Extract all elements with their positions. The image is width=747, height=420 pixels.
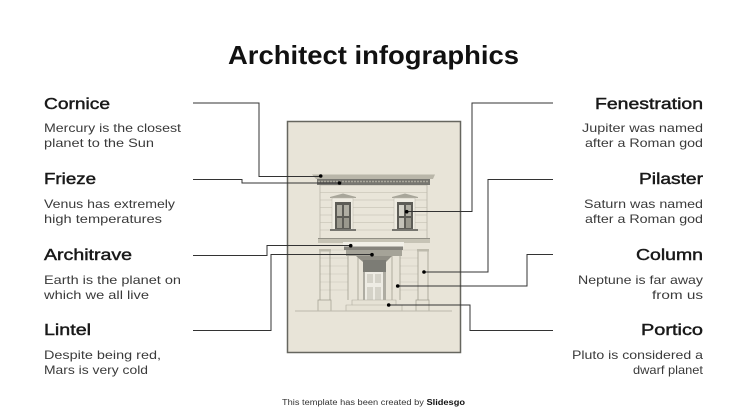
block: Fenestration: Fenestration — [595, 96, 703, 113]
block: Portico: dwarf planet — [633, 363, 704, 377]
panel background — [288, 122, 460, 352]
block: Architrave: Architrave — [44, 247, 132, 264]
lower cornice — [318, 238, 430, 243]
right window — [392, 194, 418, 231]
block: Frieze: Frieze — [44, 171, 96, 188]
block: Cornice: Mercury is the closest — [44, 121, 182, 135]
connector: Fenestration — [405, 103, 553, 214]
connector: Cornice — [193, 103, 323, 178]
block: Column: Column — [636, 247, 703, 264]
ground line — [295, 310, 452, 312]
block: Fenestration: Jupiter was named — [582, 121, 703, 135]
connector: Pilaster — [422, 180, 553, 274]
connector: Lintel — [193, 253, 374, 330]
connector: Architrave — [193, 244, 353, 256]
block: Pilaster: Pilaster — [639, 171, 704, 188]
title: Architect infographics — [228, 40, 519, 70]
block: Column: from us — [652, 288, 703, 302]
block: Lintel: Despite being red, — [44, 348, 161, 362]
door — [363, 260, 386, 303]
panel: building illustration — [288, 122, 460, 352]
block: Architrave: Earth is the planet on — [44, 273, 181, 287]
block: Column — [578, 247, 703, 302]
block: Lintel — [44, 322, 161, 377]
block: Frieze: Venus has extremely — [44, 197, 175, 211]
block: Frieze: high temperatures — [44, 212, 162, 226]
connector: Frieze — [193, 180, 341, 185]
block: Portico: Pluto is considered a — [572, 348, 703, 362]
block: Architrave — [43, 247, 181, 302]
left window — [330, 194, 356, 231]
block: Cornice — [44, 96, 182, 150]
block: Portico: Portico — [641, 322, 703, 339]
block: Architrave: which we all live — [43, 288, 149, 302]
portico roof — [343, 242, 404, 262]
connector: Column — [396, 254, 553, 288]
block: Cornice: planet to the Sun — [44, 136, 154, 150]
main cornice — [312, 174, 435, 185]
connector: Portico — [387, 303, 553, 330]
block: Lintel: Mars is very cold — [44, 363, 148, 377]
block: Fenestration: after a Roman god — [585, 136, 703, 150]
lower wall with columns — [318, 249, 429, 311]
block: Fenestration — [582, 96, 703, 150]
block: Pilaster: Saturn was named — [584, 197, 703, 211]
footer credit: This template has been created by Slidesgo — [282, 398, 465, 407]
block: Cornice: Cornice — [44, 96, 110, 113]
block: Column: Neptune is far away — [578, 273, 703, 287]
steps — [346, 300, 402, 311]
block: Frieze — [44, 171, 175, 226]
block: Pilaster — [584, 171, 704, 226]
block: Lintel: Lintel — [44, 322, 91, 339]
block: Portico — [572, 322, 704, 377]
block: Pilaster: after a Roman god — [585, 212, 703, 226]
upper wall — [320, 185, 427, 239]
